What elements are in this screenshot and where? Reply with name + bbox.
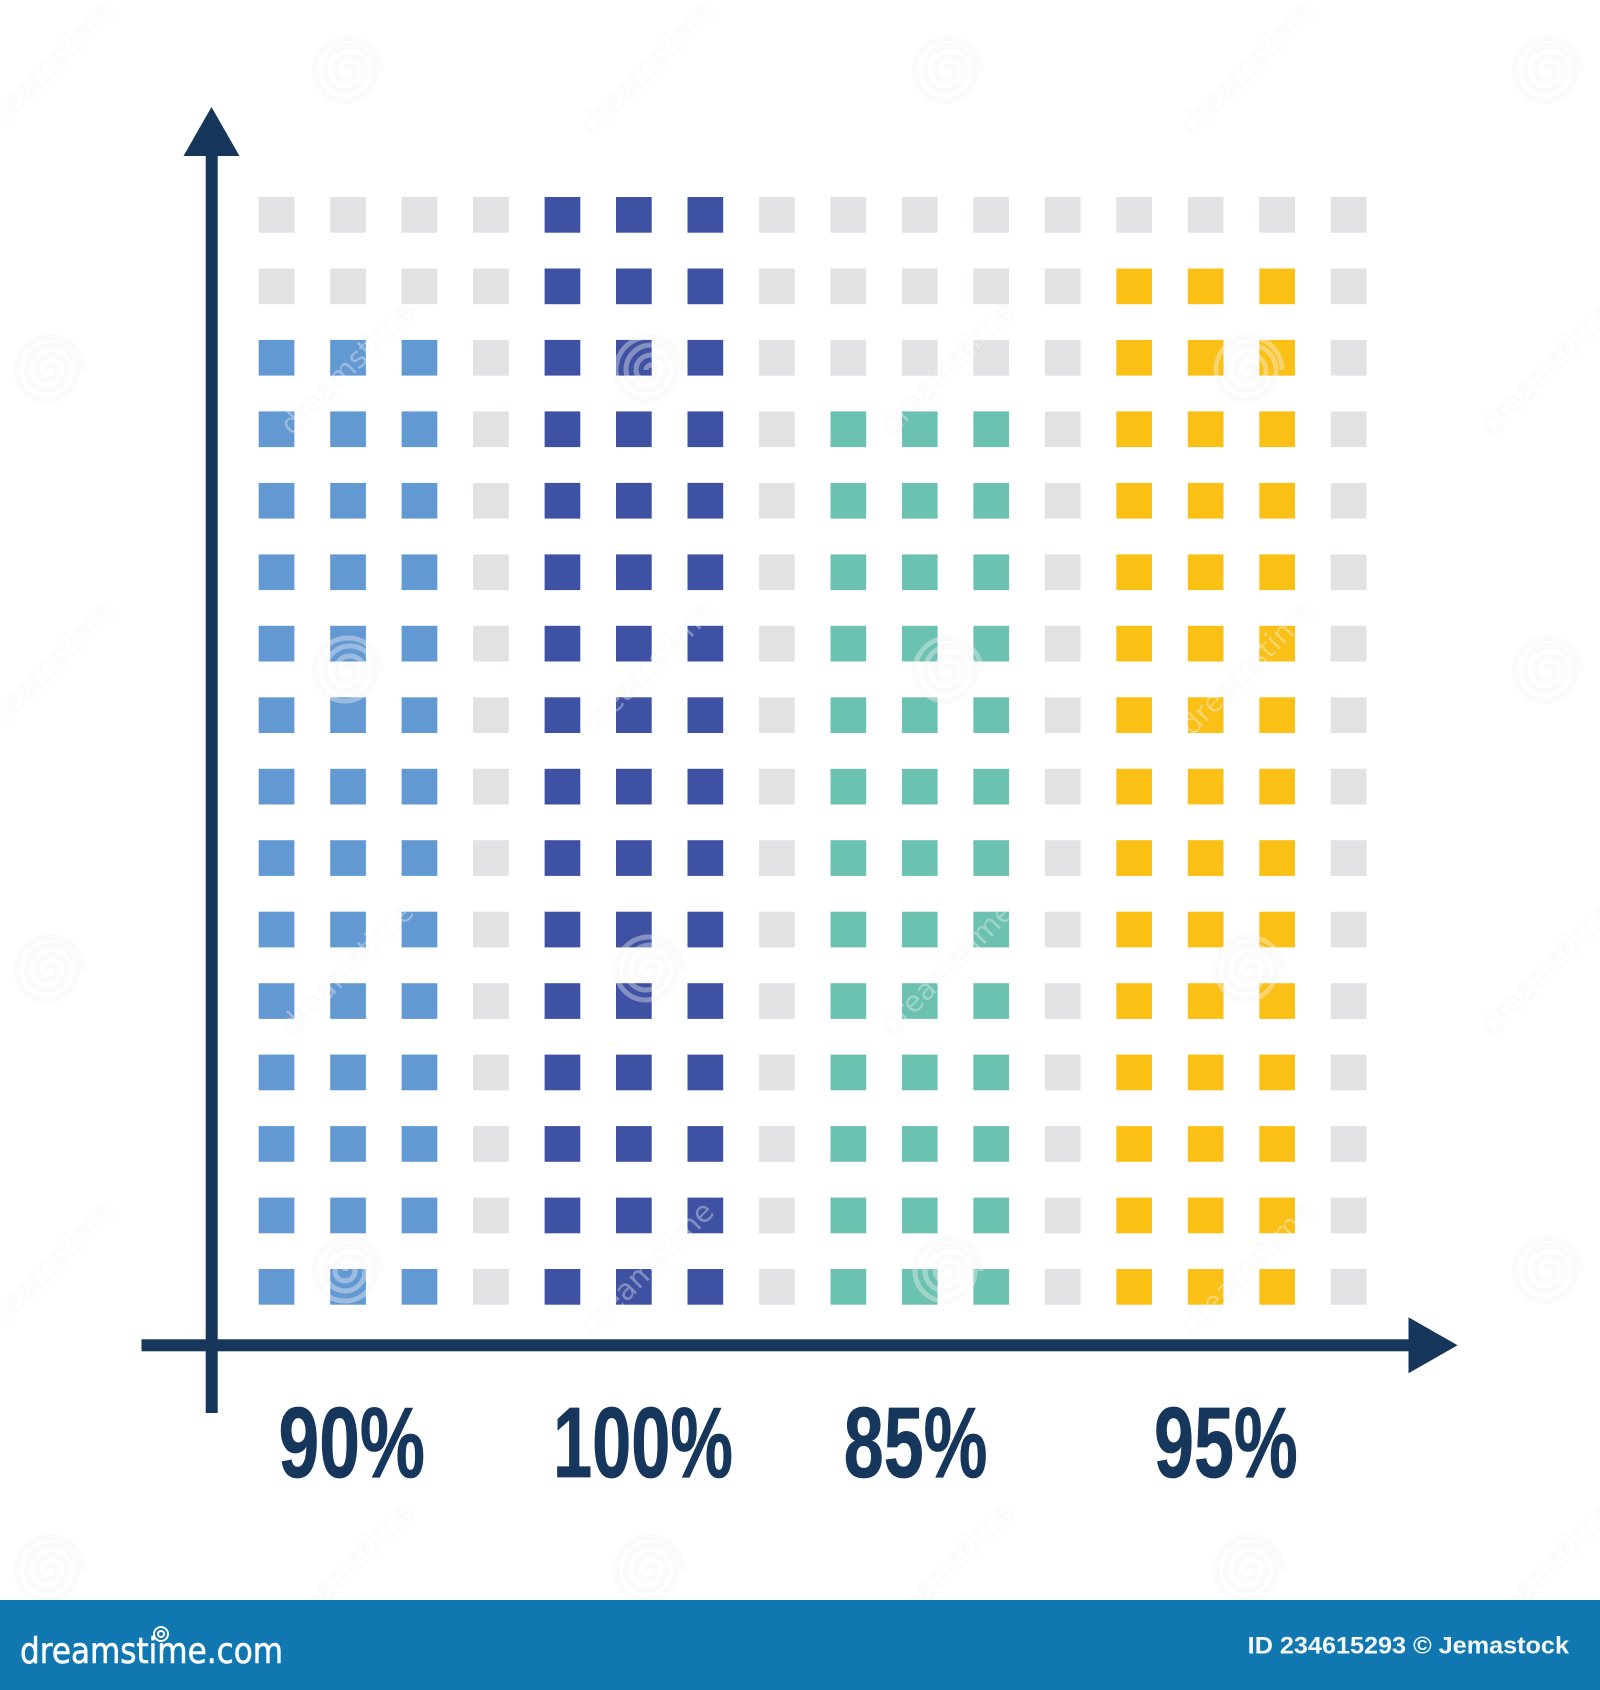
icon: logo spiral <box>154 1627 168 1641</box>
label: 100%: 100% <box>553 1387 733 1499</box>
label: 95%: 95% <box>1154 1387 1298 1499</box>
footer logo text: dreamstime.com <box>20 1631 283 1672</box>
watermark text: dreamstime <box>873 1494 1021 1642</box>
separator column of grey squares 2 <box>759 197 795 1305</box>
label: 90%: 90% <box>278 1387 425 1499</box>
footer bar <box>0 1600 1600 1690</box>
column group: 85% teal <box>830 197 1009 1305</box>
column group: 90% blue <box>259 197 437 1305</box>
watermark text: dreamstime <box>273 1494 421 1642</box>
arrow: horizontal axis <box>142 1317 1458 1373</box>
watermark text: dreamstime <box>1173 594 1321 742</box>
separator column of grey squares 3 <box>1045 197 1081 1305</box>
arrow: vertical axis <box>184 107 240 1413</box>
dot matrix chart <box>259 197 1367 1305</box>
column group: 100% indigo <box>545 197 723 1305</box>
watermark text: dreamstime <box>273 294 421 442</box>
column group: 95% yellow <box>1116 197 1295 1305</box>
separator column of grey squares 4 <box>1331 197 1366 1305</box>
watermark text: dreamstime <box>873 294 1021 442</box>
watermark text: dreamstime <box>573 1194 721 1342</box>
watermark text: dreamstime <box>873 894 1021 1042</box>
watermark text: dreamstime <box>573 594 721 742</box>
watermark text: dreamstime <box>273 894 421 1042</box>
footer credit: ID 234615293 © Jemastock <box>1248 1632 1569 1659</box>
label: 85%: 85% <box>844 1387 988 1499</box>
separator column of grey squares 1 <box>473 197 509 1305</box>
watermark text: dreamstime <box>1173 1194 1321 1342</box>
